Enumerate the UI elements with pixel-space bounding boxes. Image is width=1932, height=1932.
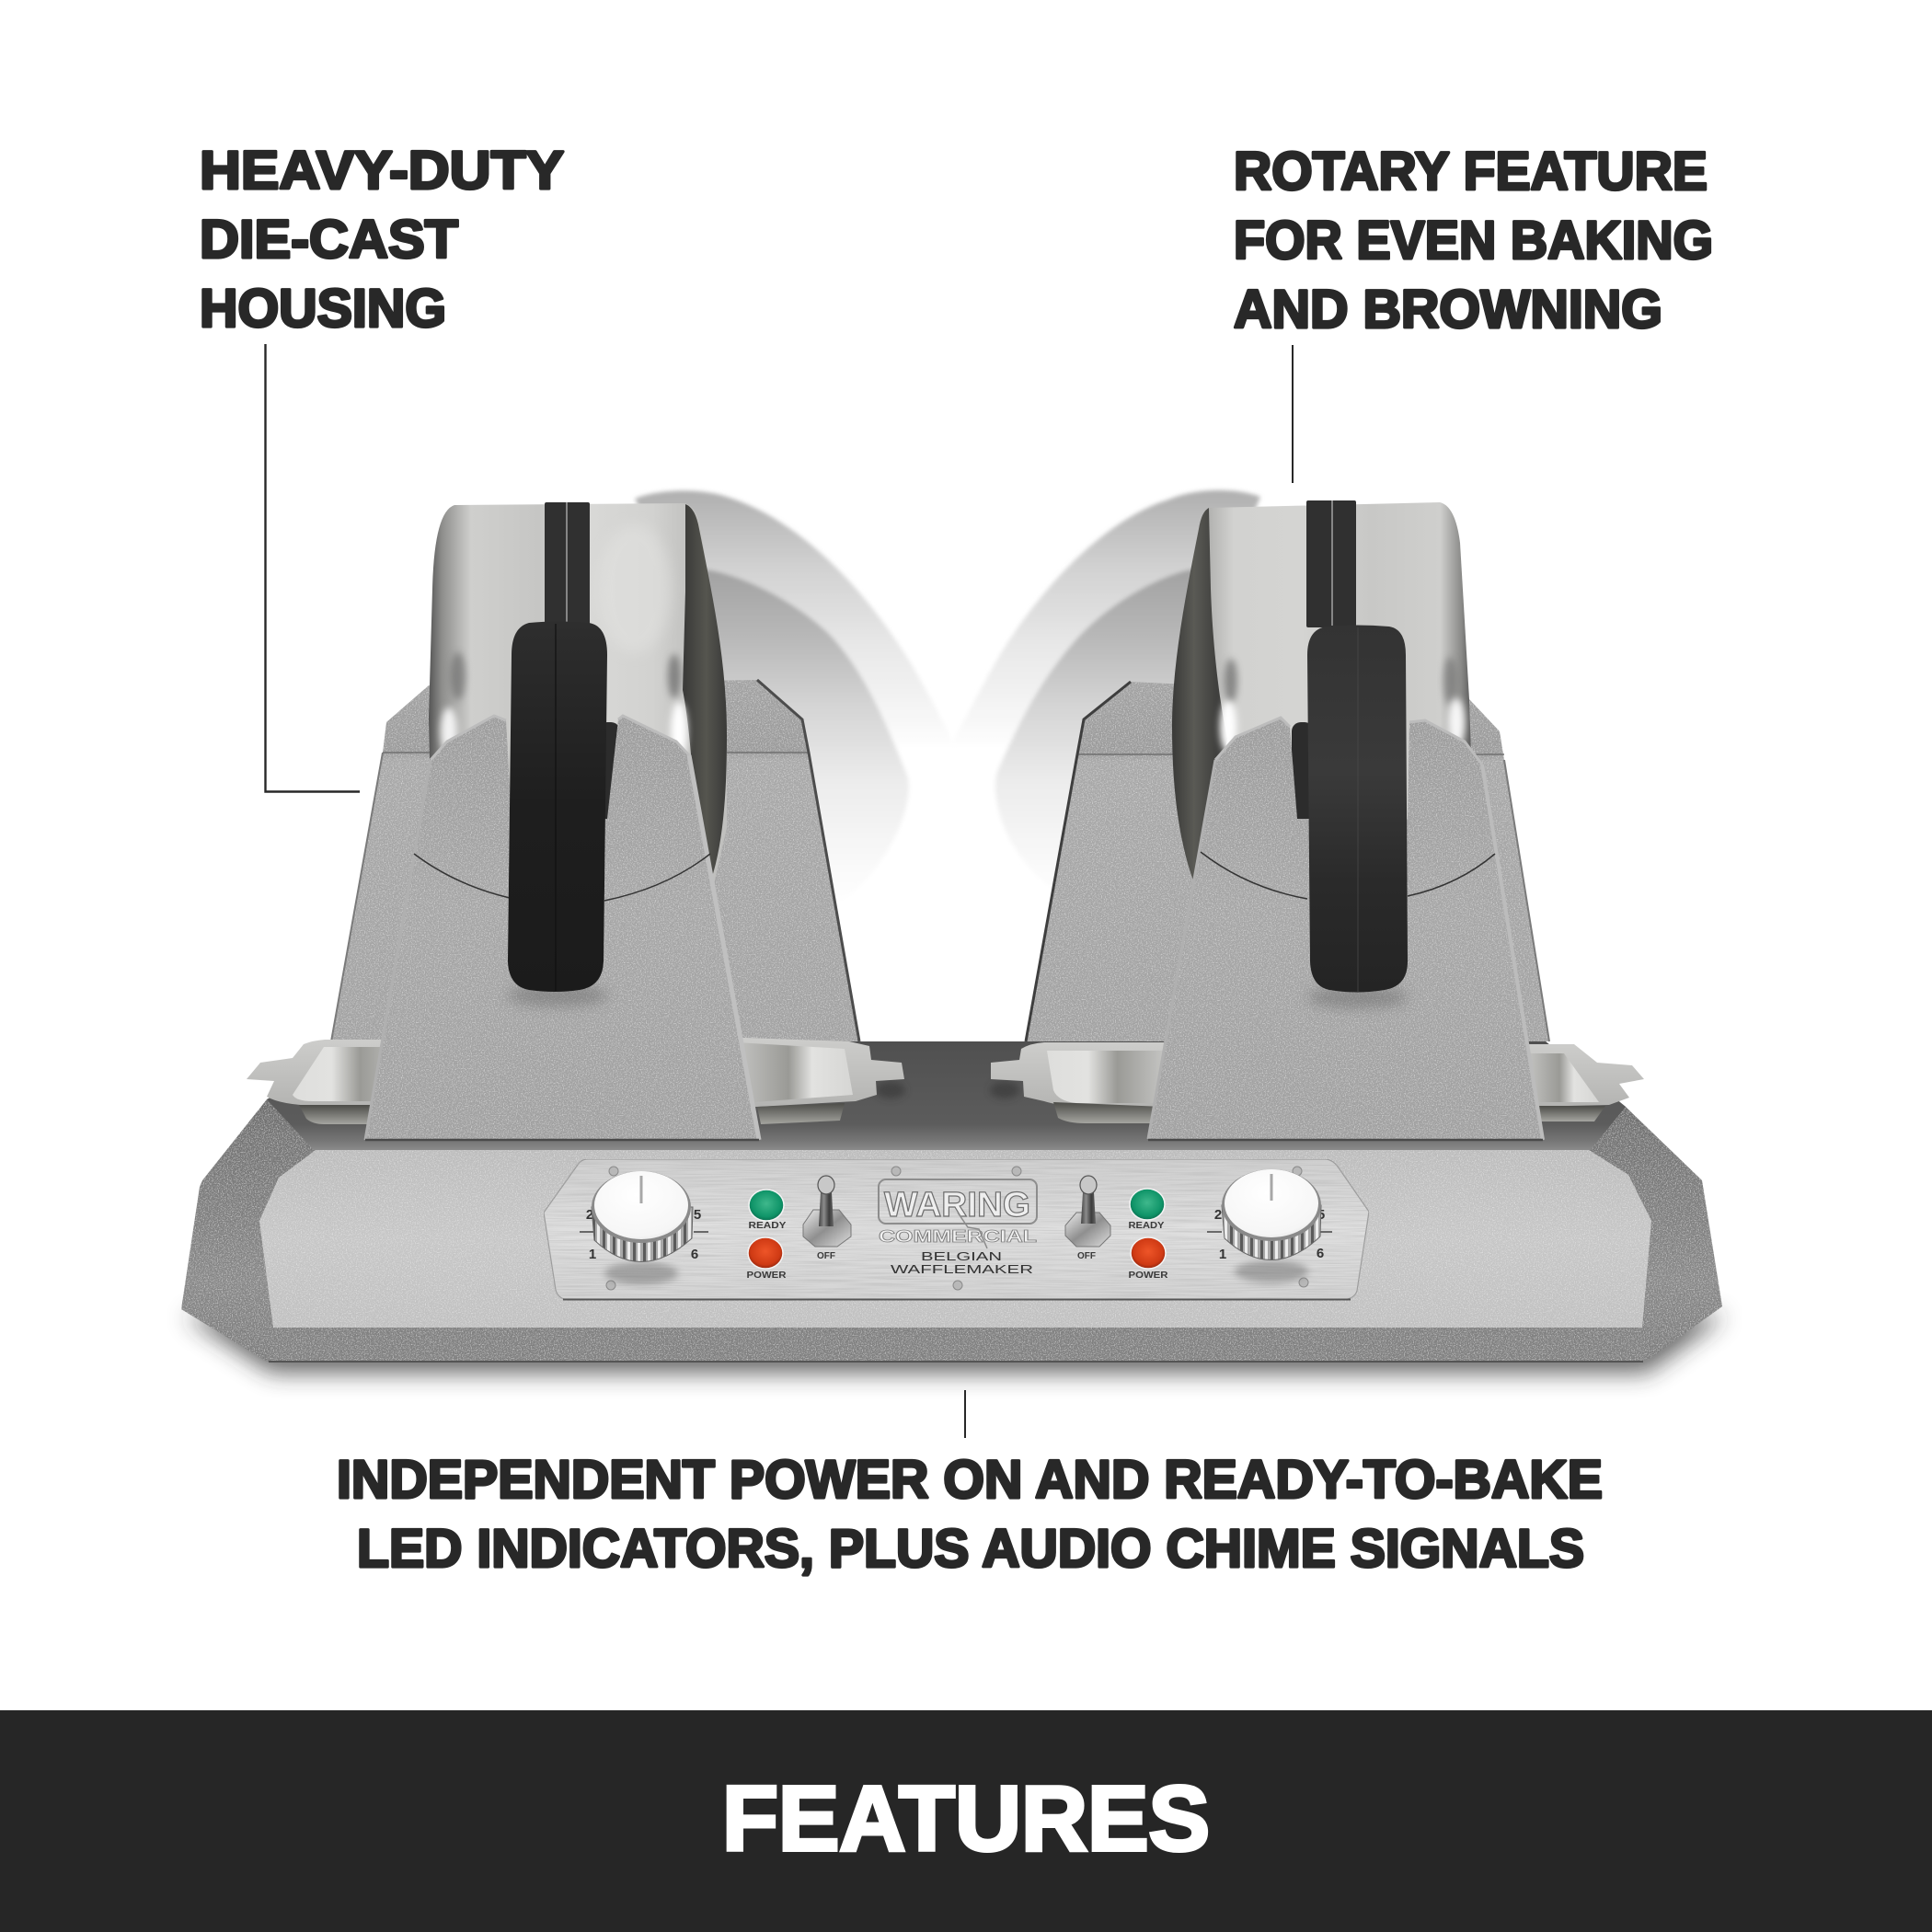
left unit: handle [508, 622, 607, 992]
leader line: housing [265, 344, 360, 791]
control panel: right LED indicators [1128, 1189, 1168, 1281]
control panel: right toggle switch [1065, 1176, 1110, 1261]
leader line: rotary feature [1292, 345, 1294, 483]
control panel: right dial scale: 6 [1317, 1246, 1324, 1261]
control panel: right knob [1222, 1169, 1321, 1282]
base: top deck [267, 1041, 1626, 1152]
motion blur centre fade [926, 768, 978, 897]
right unit: trays [990, 1042, 1644, 1123]
control panel: right dial scale: 2 [1214, 1207, 1222, 1223]
base: bottom strip [270, 1328, 1648, 1362]
control panel: Waring Commercial logo [879, 1179, 1037, 1248]
rotation motion blur: right [948, 490, 1260, 887]
callout: LED indicators and chime: INDEPENDENT POWER ON AND READY-TO-BAKE [337, 1450, 1603, 1510]
base: outer shell [181, 1041, 1722, 1362]
footer title: FEATURES [722, 1767, 1210, 1870]
leader line: indicators [964, 1390, 966, 1438]
control panel: right toggle switch: OFF [1077, 1251, 1096, 1261]
control panel: left dial scale: 2 [586, 1207, 593, 1223]
callout: LED indicators and chime: LED INDICATORS, PLUS AUDIO CHIME SIGNALS [357, 1519, 1584, 1579]
left unit: trays [247, 1038, 905, 1124]
control panel: right dial scale: 5 [1317, 1207, 1325, 1223]
control panel: left dial scale [580, 1207, 708, 1262]
callout: heavy-duty die-cast housing: DIE-CAST [200, 210, 458, 270]
control panel: right dial scale: 1 [1219, 1247, 1226, 1262]
callout: rotary feature: ROTARY FEATURE [1234, 142, 1708, 201]
left unit: front pedestal [365, 716, 759, 1140]
left unit: drum [429, 502, 727, 888]
control panel: Waring Commercial logo: COMMERCIAL [879, 1227, 1037, 1246]
control panel: right LED indicators: READY [1128, 1221, 1165, 1231]
control panel: left dial scale: 5 [694, 1207, 701, 1223]
control panel: left LED indicators [747, 1190, 787, 1281]
control panel [544, 1159, 1369, 1300]
control panel: left LED indicators: POWER [747, 1271, 787, 1281]
control panel: brushed plate [544, 1159, 1369, 1300]
callout: rotary feature: FOR EVEN BAKING [1234, 211, 1713, 270]
callout: rotary feature: AND BROWNING [1234, 280, 1662, 339]
left unit: rear pedestal [331, 680, 859, 1041]
control panel: screws [606, 1167, 1308, 1290]
right unit: drum [1172, 500, 1472, 888]
control panel: Waring Commercial logo: WARING [884, 1186, 1030, 1225]
rotation motion blur: left [635, 490, 957, 906]
base of waffle maker [181, 1041, 1722, 1362]
callout: heavy-duty die-cast housing [200, 141, 564, 339]
left unit: pivot [598, 722, 620, 828]
control panel: right LED indicators: POWER [1128, 1271, 1168, 1281]
control panel: left toggle switch: OFF [817, 1251, 835, 1261]
control panel: product name: BELGIAN [921, 1249, 1002, 1263]
callout: heavy-duty die-cast housing: HOUSING [200, 279, 446, 339]
callout: rotary feature [1234, 142, 1713, 339]
right unit [990, 500, 1644, 1140]
right unit: handle [1307, 626, 1408, 993]
control panel: product name [891, 1249, 1033, 1276]
right unit: pivot [1292, 722, 1314, 828]
callout: heavy-duty die-cast housing: HEAVY-DUTY [200, 141, 564, 201]
control panel: left dial scale: 6 [691, 1247, 698, 1262]
base: front face [259, 1150, 1651, 1328]
right unit: rear pedestal [1026, 682, 1549, 1041]
control panel: right dial scale [1207, 1207, 1332, 1262]
footer band [0, 1710, 1932, 1932]
ground shadow [184, 1316, 1725, 1373]
control panel: product name: WAFFLEMAKER [891, 1262, 1033, 1276]
control panel: left knob [592, 1171, 693, 1284]
control panel: left toggle switch [803, 1176, 851, 1261]
control panel: left LED indicators: READY [749, 1221, 787, 1231]
control panel: left dial scale: 1 [589, 1247, 596, 1262]
right unit: front pedestal [1148, 718, 1543, 1140]
left unit [247, 502, 905, 1140]
callout: LED indicators and chime [337, 1450, 1603, 1579]
